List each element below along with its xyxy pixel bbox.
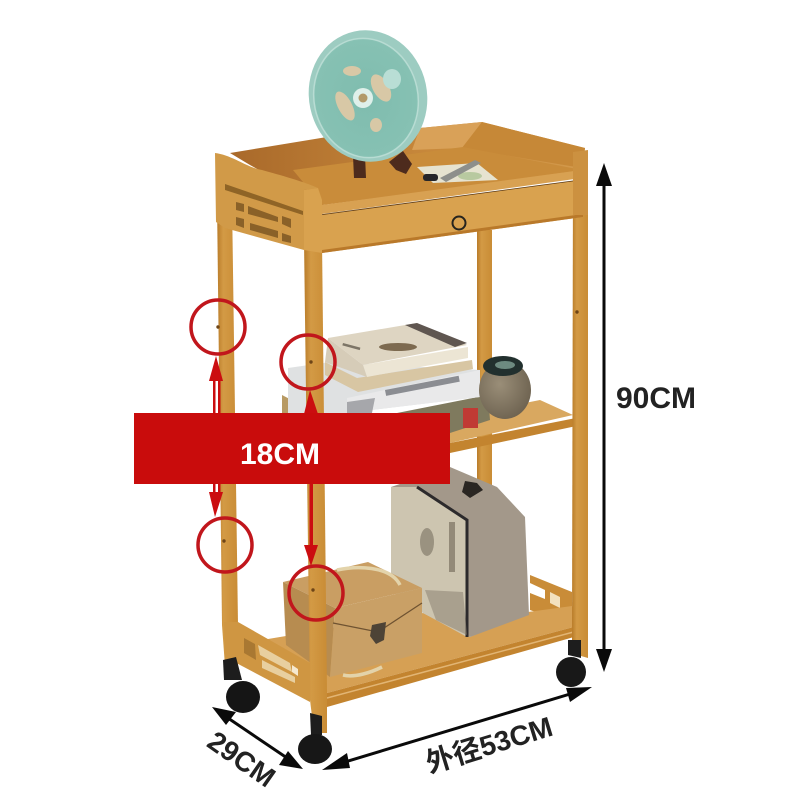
suitcase xyxy=(391,467,529,637)
cart: bottom shelf front edge xyxy=(327,625,581,707)
cart: middle shelf xyxy=(440,400,581,453)
cart: bottom left end panel xyxy=(224,622,310,702)
end panel fretwork xyxy=(236,202,291,243)
tray back rim xyxy=(230,122,585,205)
height label: 90CM xyxy=(616,382,696,415)
paper and tool on tray xyxy=(417,160,498,183)
plate flower motifs xyxy=(331,66,395,132)
gift box xyxy=(283,562,422,677)
right tray post xyxy=(573,150,588,215)
drawer front xyxy=(322,180,583,253)
tray surface xyxy=(293,147,582,205)
cart: back legs xyxy=(217,200,492,680)
rope base xyxy=(343,667,382,676)
depth label: 29CM xyxy=(202,725,281,793)
tray left end panel xyxy=(215,153,318,250)
red label: 18CM: 18CM xyxy=(240,438,320,471)
height arrow: 90CM xyxy=(596,163,612,672)
cart: bottom shelf surface xyxy=(262,606,581,693)
book: beige xyxy=(325,360,473,392)
caster: front xyxy=(310,713,322,735)
ceramic pot xyxy=(479,356,531,419)
red circle markers xyxy=(191,300,343,620)
width label: 外径53CM xyxy=(422,711,556,779)
casters xyxy=(223,640,586,764)
caster: back left xyxy=(223,657,242,680)
cart: top tray xyxy=(215,122,585,253)
plate stands xyxy=(353,151,412,178)
cart: front legs xyxy=(216,150,588,733)
drawer handle ring xyxy=(452,216,466,230)
red label: 18CM xyxy=(134,413,450,484)
book: white xyxy=(288,362,480,413)
clasp xyxy=(370,622,386,644)
red measurement arrows xyxy=(209,356,318,566)
width arrow: 53CM xyxy=(322,687,592,770)
depth arrow: 29CM xyxy=(212,707,303,769)
celadon plate xyxy=(297,19,439,173)
caster: right xyxy=(568,640,581,658)
cart: bottom shelf back panel xyxy=(530,575,572,625)
book: red label xyxy=(463,408,478,428)
book: cream top xyxy=(328,323,467,365)
books stack xyxy=(282,323,490,433)
book: olive bottom xyxy=(397,395,490,433)
tray front left post xyxy=(304,188,322,253)
rope handle xyxy=(337,568,400,585)
